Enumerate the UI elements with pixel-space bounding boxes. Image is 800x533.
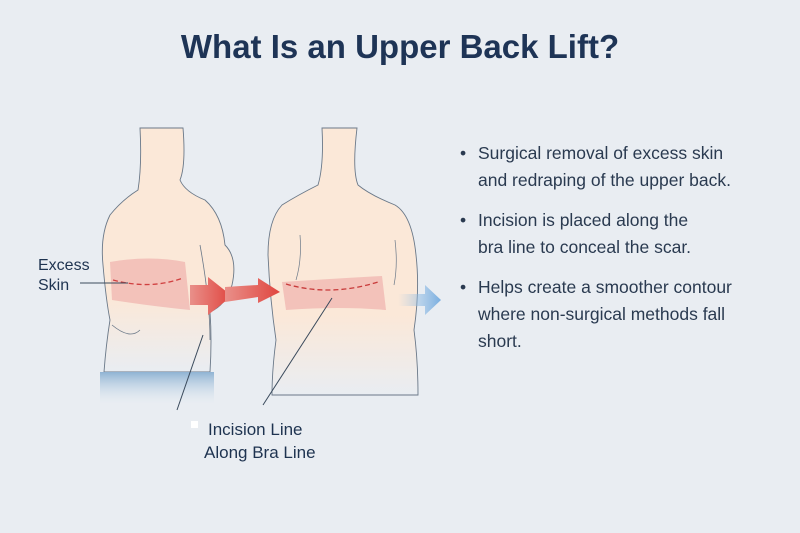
title: What Is an Upper Back Lift? bbox=[181, 28, 619, 65]
band: excess skin bbox=[110, 258, 190, 310]
bullet list: Incision is placed along the bbox=[478, 210, 688, 230]
bullet list: • bbox=[460, 277, 466, 297]
bullet list: short. bbox=[478, 331, 522, 351]
bullet list: and redraping of the upper back. bbox=[478, 170, 731, 190]
bullet list bbox=[460, 143, 732, 351]
label: excess skin: Excess bbox=[38, 257, 90, 274]
bullet list: where non-surgical methods fall bbox=[478, 304, 725, 324]
arrow: red bbox=[190, 277, 280, 315]
marker bbox=[191, 421, 198, 428]
bullet list: Surgical removal of excess skin bbox=[478, 143, 723, 163]
label: excess skin: Skin bbox=[38, 277, 69, 294]
label: incision line: Incision Line bbox=[208, 420, 303, 439]
bullet list: • bbox=[460, 210, 466, 230]
band: incision bbox=[282, 276, 386, 310]
arrow: blue bbox=[398, 285, 441, 315]
figure: before bbox=[100, 128, 234, 404]
label: excess skin bbox=[38, 257, 90, 294]
label: incision line bbox=[204, 420, 316, 462]
bullet list: Helps create a smoother contour bbox=[478, 277, 732, 297]
label: incision line: Along Bra Line bbox=[204, 443, 316, 462]
leader lines bbox=[80, 283, 332, 410]
bullet list: • bbox=[460, 143, 466, 163]
bullet list: bra line to conceal the scar. bbox=[478, 237, 691, 257]
figure: after bbox=[268, 128, 418, 395]
